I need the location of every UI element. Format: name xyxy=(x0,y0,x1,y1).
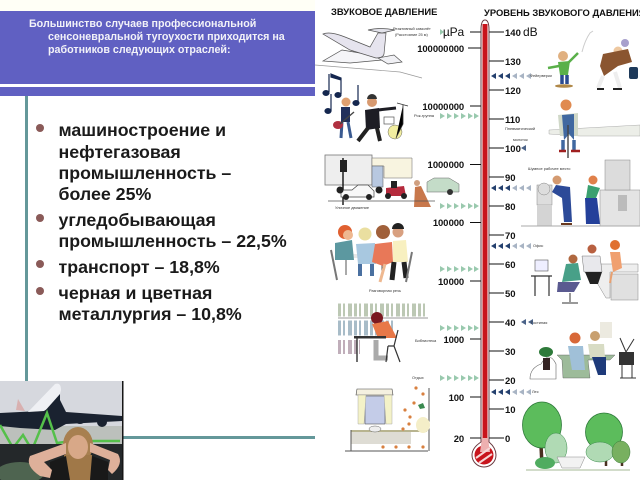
pressure scale, micropascals: 100 xyxy=(449,393,464,404)
small captions: Библиотека xyxy=(415,338,437,343)
decibel scale: 70 xyxy=(505,231,516,242)
small captions: Разговорная речь xyxy=(369,288,401,293)
blue level chevrons xyxy=(491,73,533,395)
bullet list xyxy=(36,120,287,324)
small captions: Уличное движение xyxy=(335,205,369,210)
small captions: Лес xyxy=(532,389,539,394)
pressure scale, micropascals: 20 xyxy=(454,434,464,445)
decibel scale: 110 xyxy=(505,115,520,126)
small captions: Пневматический xyxy=(505,126,535,131)
bullet list: промышленность – 22,5% xyxy=(58,231,287,251)
heading: Большинство случаев профессиональной xyxy=(29,18,256,30)
thermometer xyxy=(472,20,496,467)
illustration: jet plane xyxy=(315,28,422,78)
header band xyxy=(0,11,315,96)
bullet list: транспорт – 18,8% xyxy=(58,257,220,277)
pressure scale, micropascals: µPa xyxy=(443,25,464,39)
pressure scale, micropascals: 100 000 xyxy=(433,218,464,229)
illustration: bedroom xyxy=(345,386,430,451)
decibel scale: 120 xyxy=(505,86,521,97)
bullet list: черная и цветная xyxy=(58,283,212,303)
heading: сенсоневральной тугоухости приходится на xyxy=(48,31,286,43)
illustration: library xyxy=(338,310,428,362)
bullet list: угледобывающая xyxy=(58,210,216,230)
small captions: Офис xyxy=(533,243,543,248)
illustration: office xyxy=(531,240,638,303)
decibel scale: 100 xyxy=(505,144,521,155)
decibel scale: 30 xyxy=(505,347,516,358)
pressure scale, micropascals: 1000 xyxy=(443,335,464,346)
heading: sound pressure: ЗВУКОВОЕ ДАВЛЕНИЕ xyxy=(331,6,437,17)
bullet list: более 25% xyxy=(58,184,151,204)
small captions: Гостиная xyxy=(531,320,547,325)
illustration: living room xyxy=(530,322,636,379)
small captions: Рок-группа xyxy=(414,113,435,118)
pressure scale, micropascals xyxy=(417,25,481,445)
decibel scale: 10 xyxy=(505,405,516,416)
small captions: Фейерверки xyxy=(530,73,552,78)
pressure scale, micropascals: 10 000 xyxy=(438,277,464,288)
bullet list: машиностроение и xyxy=(58,120,226,140)
decibel scale: 80 xyxy=(505,202,516,213)
decibel scale: dB xyxy=(523,25,538,39)
decibel scale: 50 xyxy=(505,289,516,300)
small captions: Шумное рабочее место xyxy=(528,166,570,171)
illustration: forest xyxy=(522,402,630,470)
pressure scale, micropascals: 1 000 000 xyxy=(427,160,464,171)
photo: woman covering ears under airplane xyxy=(0,381,124,480)
illustration: jackhammer worker xyxy=(549,100,640,158)
illustration: noisy workplace xyxy=(521,160,640,226)
small captions: Реактивный самолёт xyxy=(393,26,431,31)
bullet list: нефтегазовая xyxy=(58,142,181,162)
bullet list: металлургия – 10,8% xyxy=(58,304,242,324)
illustration: rock band xyxy=(323,74,408,141)
teal frame lines xyxy=(25,96,315,439)
heading: работников следующих отраслей: xyxy=(48,44,231,56)
illustration: fireworks boy and woman xyxy=(548,31,638,89)
heading xyxy=(29,18,286,56)
small captions: (Расстояние 25 м) xyxy=(395,32,428,37)
decibel scale: 20 xyxy=(505,376,516,387)
small captions xyxy=(335,26,570,394)
green pressure chevrons xyxy=(440,29,479,381)
bullet list: промышленность – xyxy=(58,163,231,183)
small captions: Отдых xyxy=(412,375,424,380)
decibel scale: 40 xyxy=(505,318,516,329)
decibel scale: 140 xyxy=(505,28,521,39)
decibel scale: 0 xyxy=(505,434,510,445)
small captions: молоток xyxy=(513,137,528,142)
decibel scale: 130 xyxy=(505,57,521,68)
illustration: conversation xyxy=(331,223,412,282)
decibel scale xyxy=(489,25,538,445)
illustration: street traffic xyxy=(325,155,459,207)
pressure scale, micropascals: 100 000 000 xyxy=(417,44,464,55)
decibel scale: 60 xyxy=(505,260,516,271)
decibel scale: 90 xyxy=(505,173,516,184)
pressure scale, micropascals: 10 000 000 xyxy=(422,102,464,113)
